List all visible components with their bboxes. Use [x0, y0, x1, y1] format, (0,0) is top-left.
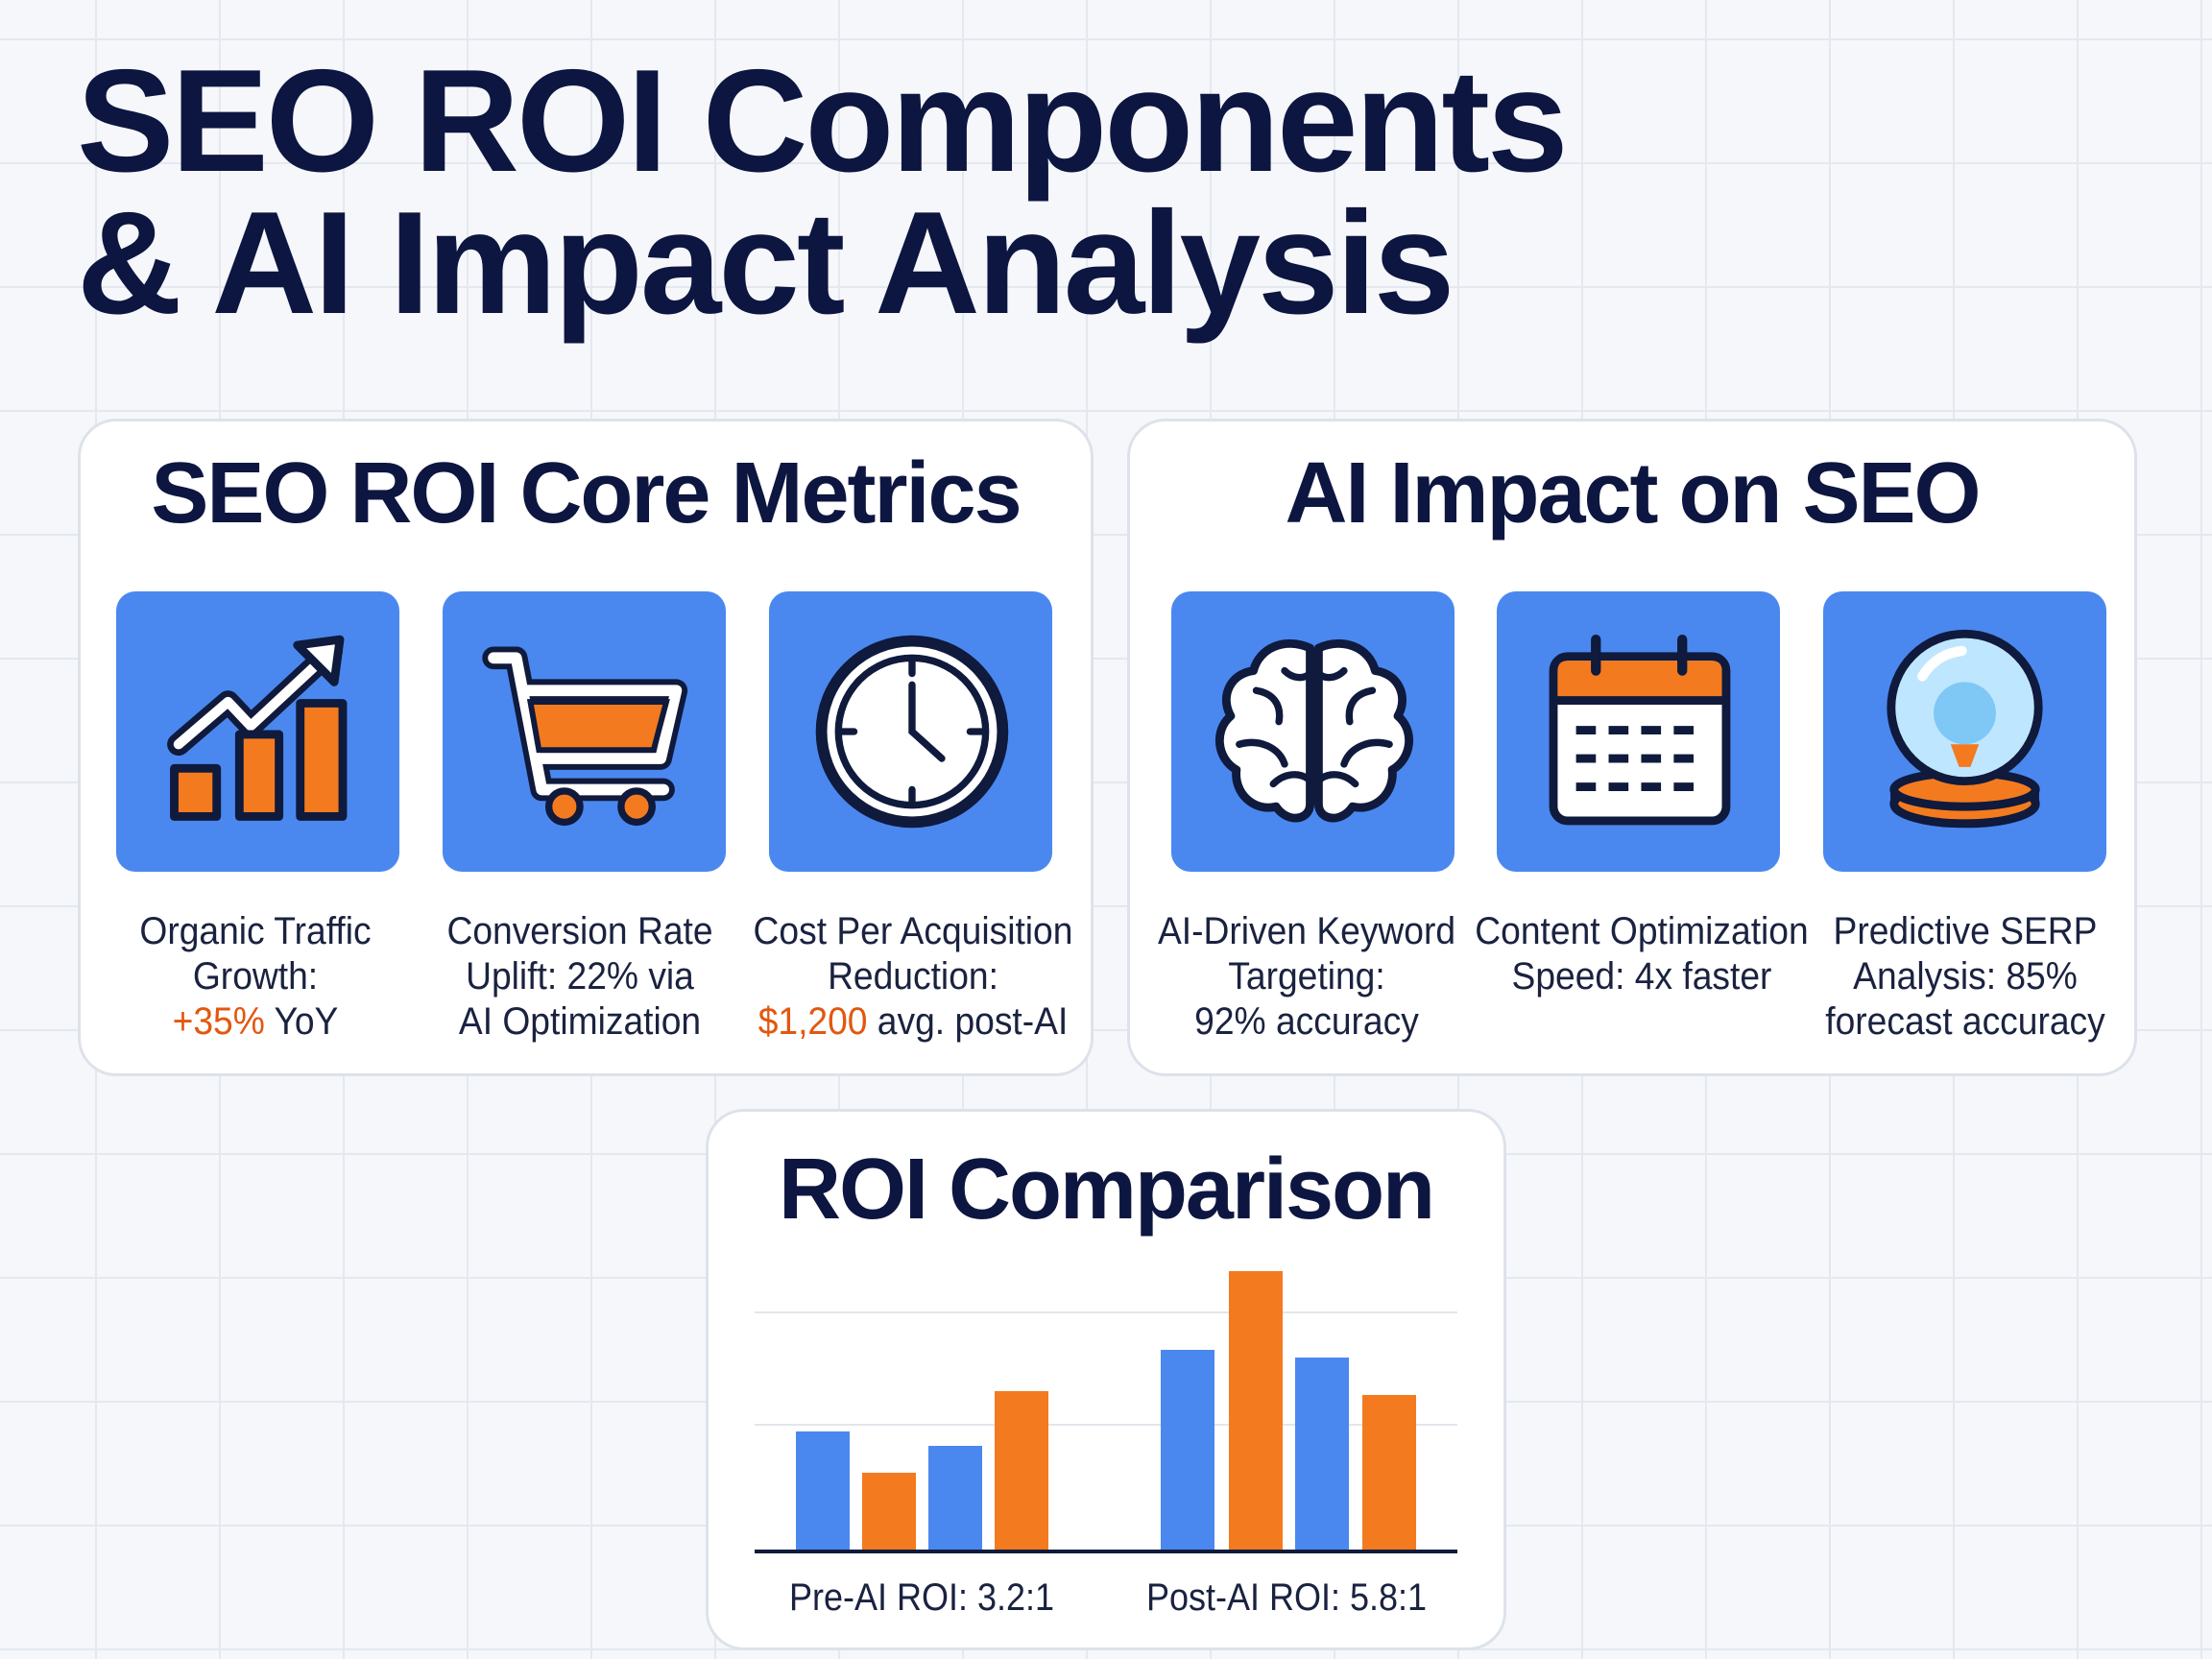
icon: growth chart [116, 591, 399, 872]
label: SERP [1825, 910, 2105, 1043]
label: content speed: Content Optimization [1475, 910, 1809, 952]
label: CPA [754, 910, 1072, 1043]
heading: AI impact: AI Impact on SEO [1285, 445, 1980, 541]
heading: core metrics: SEO ROI Core Metrics [151, 445, 1021, 541]
label: content speed [1475, 910, 1809, 998]
label: keyword: AI-Driven Keyword [1158, 910, 1455, 952]
label: conversion [446, 910, 713, 1043]
label: organic traffic: Organic Traffic [139, 910, 372, 952]
heading: ROI comparison: ROI Comparison [779, 1142, 1433, 1238]
label: conversion: Conversion Rate [446, 910, 713, 952]
bar chart: Post-AI ROI: 5.8:1 [1146, 1576, 1427, 1619]
icon: clock [769, 591, 1052, 872]
bar chart: Pre-AI ROI: 3.2:1 [789, 1576, 1054, 1619]
panel: ROI comparison [706, 1109, 1506, 1650]
label: organic traffic: Growth: [193, 955, 318, 998]
label: organic traffic [139, 910, 372, 1043]
label: SERP: forecast accuracy [1825, 1000, 2105, 1043]
icon: brain [1171, 591, 1455, 872]
label: keyword: 92% accuracy [1194, 1000, 1419, 1043]
title [77, 39, 1566, 345]
panel: core metrics [78, 419, 1094, 1076]
label: organic traffic: +35% YoY [173, 1000, 338, 1043]
label: conversion: Uplift: 22% via [466, 955, 694, 998]
icon: calendar [1497, 591, 1780, 872]
label: CPA: Reduction: [828, 955, 998, 998]
label: conversion: AI Optimization [459, 1000, 701, 1043]
label: keyword [1158, 910, 1455, 1043]
icon: cart [443, 591, 726, 872]
label: SERP: Predictive SERP [1834, 910, 2097, 952]
label: CPA: Cost Per Acquisition [754, 910, 1072, 952]
title: SEO ROI Components [77, 39, 1566, 203]
icon: crystal ball [1823, 591, 2106, 872]
label: SERP: Analysis: 85% [1853, 955, 2078, 998]
label: content speed: Speed: 4x faster [1512, 955, 1771, 998]
title: & AI Impact Analysis [77, 181, 1452, 345]
panel: AI impact [1127, 419, 2137, 1076]
label: CPA: $1,200 avg. post-AI [758, 1000, 1068, 1043]
label: keyword: Targeting: [1228, 955, 1385, 998]
